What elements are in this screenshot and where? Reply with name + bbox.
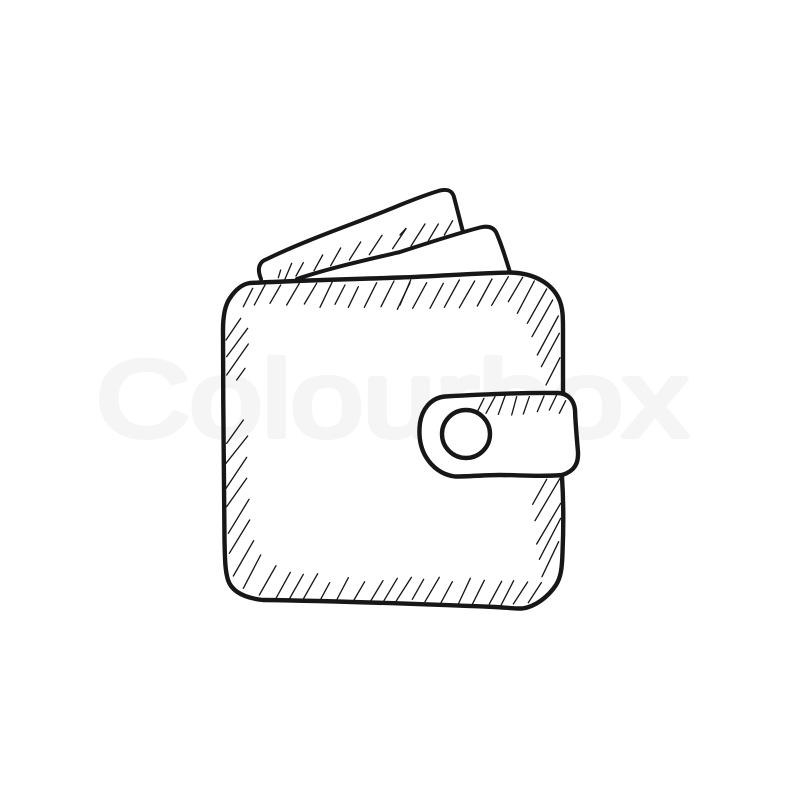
clasp button bbox=[442, 410, 490, 458]
watermark: Colourbox: Colourbox bbox=[96, 338, 688, 459]
hatching, upper right region bbox=[400, 221, 566, 415]
wallet body outline bbox=[223, 272, 563, 608]
hatching, lower region bbox=[226, 420, 561, 605]
icon: wallet sketch bbox=[223, 190, 578, 608]
wallet clasp strap bbox=[419, 393, 578, 476]
back card outline bbox=[259, 190, 463, 279]
hatching, upper left region bbox=[226, 229, 410, 380]
front card outline bbox=[297, 227, 510, 279]
